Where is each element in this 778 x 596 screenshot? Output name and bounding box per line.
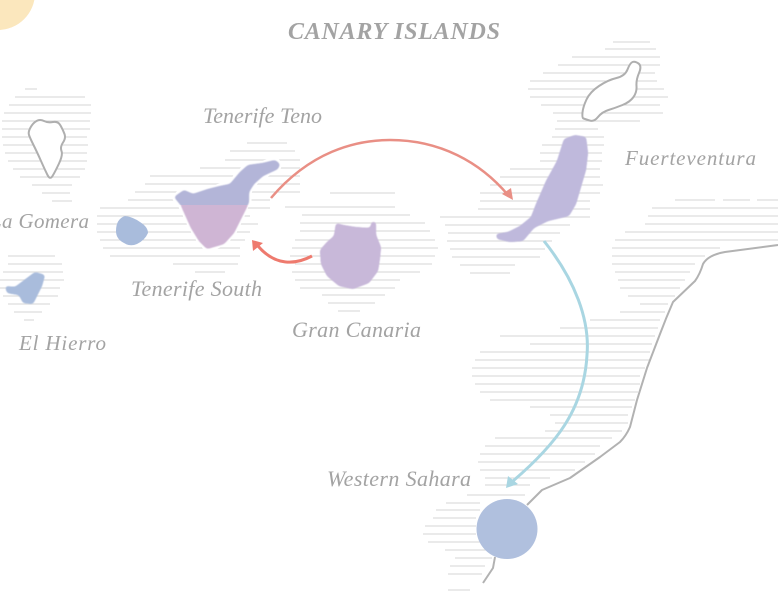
label: Gran Canaria: Gran Canaria: [292, 317, 421, 342]
island: Fuerteventura: [496, 135, 588, 242]
island: Tenerife: [174, 160, 280, 249]
label: Western Sahara: Western Sahara: [327, 466, 471, 491]
arrow: Tenerife to Fuerteventura: [271, 140, 513, 200]
title: CANARY ISLANDS: [288, 19, 500, 45]
arrow: Gran Canaria to Tenerife South: [252, 240, 312, 262]
label: Tenerife South: Tenerife South: [131, 276, 262, 301]
island: Gran Canaria: [320, 222, 381, 289]
island: Lanzarote: [582, 62, 640, 121]
sun corner: [0, 0, 35, 30]
Tenerife Teno north part: [174, 160, 280, 207]
label: El Hierro: El Hierro: [18, 331, 106, 355]
label: Fuerteventura: Fuerteventura: [624, 146, 756, 170]
island: La Gomera: [116, 216, 148, 245]
island: El Hierro: [5, 272, 45, 304]
coastline of Western Sahara: [483, 245, 778, 583]
Tenerife South part: [180, 205, 248, 249]
Western Sahara marker: [476, 499, 538, 559]
island: La Palma: [29, 120, 65, 178]
label: Tenerife Teno: Tenerife Teno: [203, 103, 322, 128]
arrow: Fuerteventura to Western Sahara: [506, 241, 587, 488]
